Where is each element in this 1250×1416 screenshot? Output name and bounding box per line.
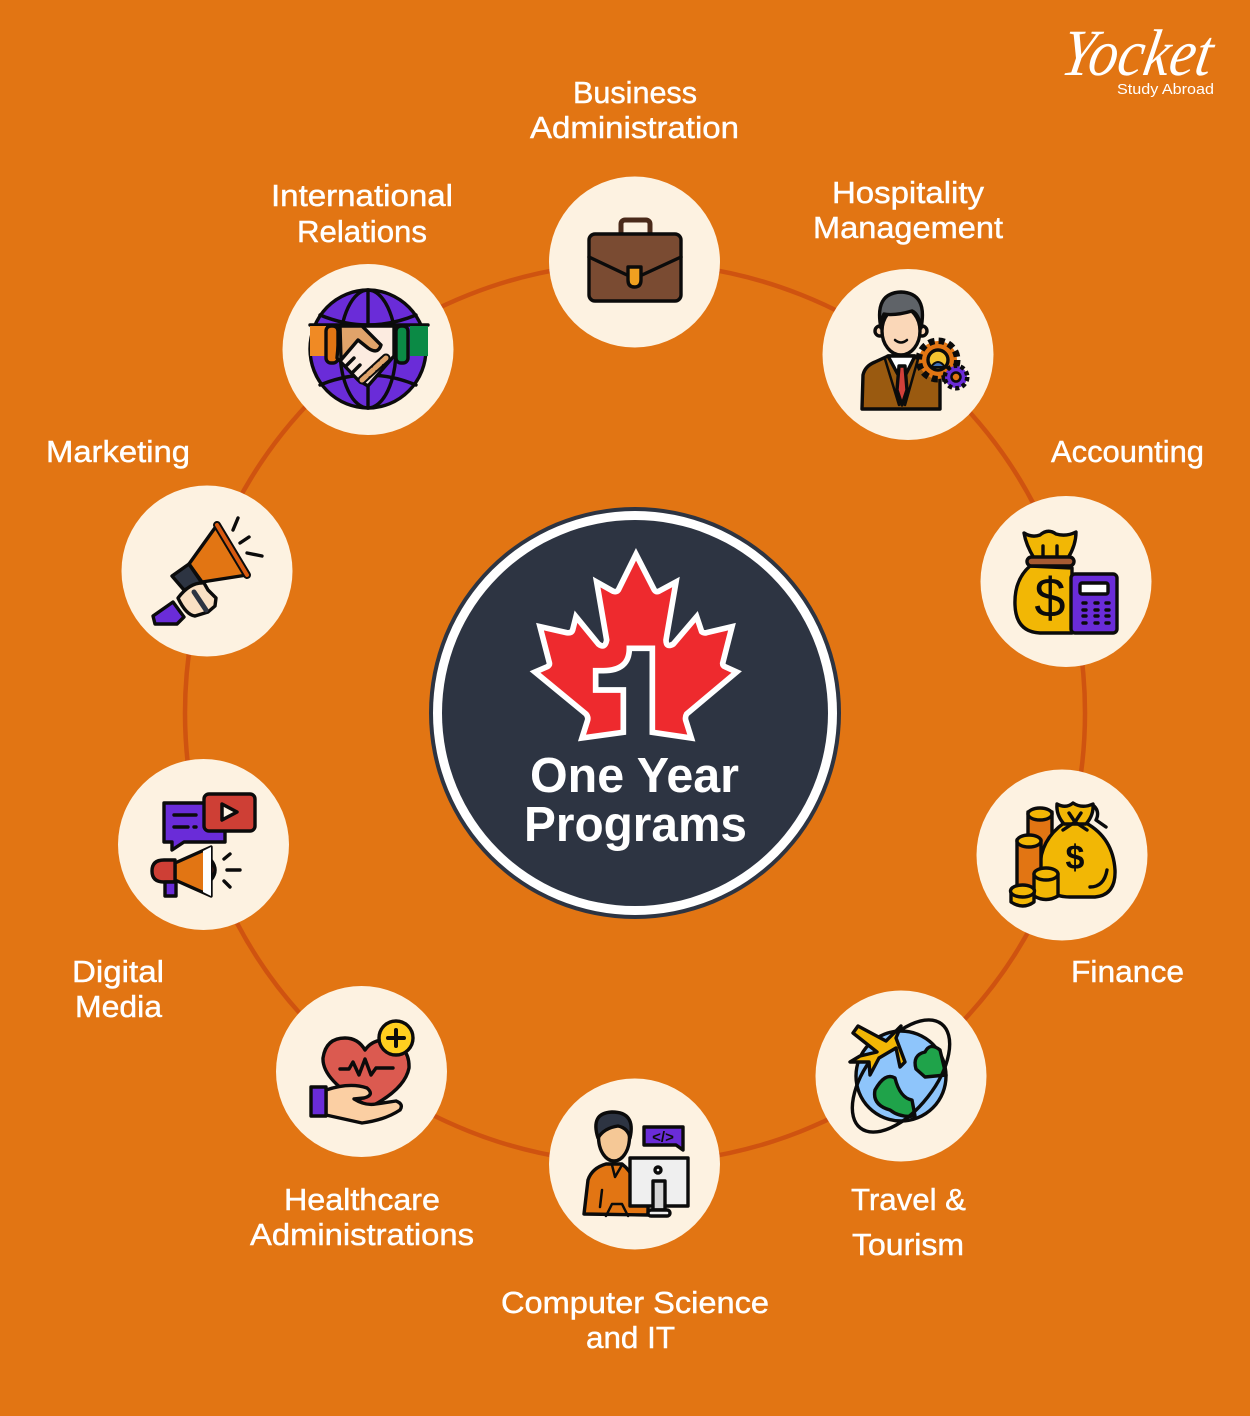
label: and IT (586, 1320, 675, 1355)
label (813, 175, 1003, 245)
panel: Healthcare Administrations (250, 986, 474, 1252)
panel: Finance (976, 770, 1184, 989)
icon: heart in hand (311, 1021, 413, 1123)
label: Marketing (46, 434, 190, 469)
label: Healthcare (284, 1182, 440, 1217)
label: Computer Science (501, 1285, 769, 1320)
icon: globe with plane (834, 1003, 968, 1149)
label: Business (573, 75, 697, 110)
label (271, 178, 453, 249)
label: International (271, 178, 453, 213)
panel: Digital Media (72, 759, 289, 1024)
label: Tourism (852, 1227, 964, 1262)
label: Media (75, 989, 163, 1024)
label: Hospitality (832, 175, 985, 210)
icon: globe and handshake (310, 290, 428, 408)
panel: International Relations (271, 178, 454, 435)
panel: Accounting (980, 434, 1204, 667)
logo: Yocket Study Abroad: Yocket (1056, 17, 1220, 90)
panel: Hospitality Management (813, 175, 1003, 440)
icon: briefcase (589, 220, 681, 301)
label (851, 1182, 966, 1262)
label (72, 954, 164, 1024)
icon: money bag and coins (1010, 803, 1115, 906)
label: Administrations (250, 1217, 474, 1252)
panel: Computer Science and IT (501, 1078, 769, 1355)
panel: Marketing (46, 434, 292, 656)
label (501, 1285, 769, 1355)
label (250, 1182, 474, 1252)
label: Digital (72, 954, 164, 989)
panel: Business Administration (530, 75, 739, 348)
label: Finance (1071, 954, 1184, 989)
label: Relations (297, 214, 427, 249)
icon: maple leaf with number 1 (535, 554, 737, 738)
label: Administration (530, 110, 739, 145)
icon: dollar sign: $ (1034, 566, 1066, 629)
icon: dollar sign: $ (1066, 839, 1085, 877)
label (530, 75, 739, 145)
logo: Yocket Study Abroad: Study Abroad (1117, 81, 1214, 98)
label: Travel & (851, 1182, 966, 1217)
icon: businessman with gears (862, 292, 967, 409)
connecting ring (185, 263, 1085, 1163)
label: Management (813, 210, 1003, 245)
heading (524, 749, 747, 852)
icon: hand holding megaphone (153, 518, 262, 624)
icon: money bag and calculator (1015, 531, 1117, 633)
icon: chat, video and megaphone (152, 794, 255, 896)
heading: Programs (524, 798, 747, 852)
panel: Travel & Tourism (816, 990, 986, 1262)
label: Accounting (1051, 434, 1204, 469)
heading: One Year (530, 749, 739, 803)
icon: developer at computer (584, 1112, 688, 1216)
central badge: One Year Programs (429, 507, 841, 919)
icon: code tag: </> (652, 1129, 674, 1146)
